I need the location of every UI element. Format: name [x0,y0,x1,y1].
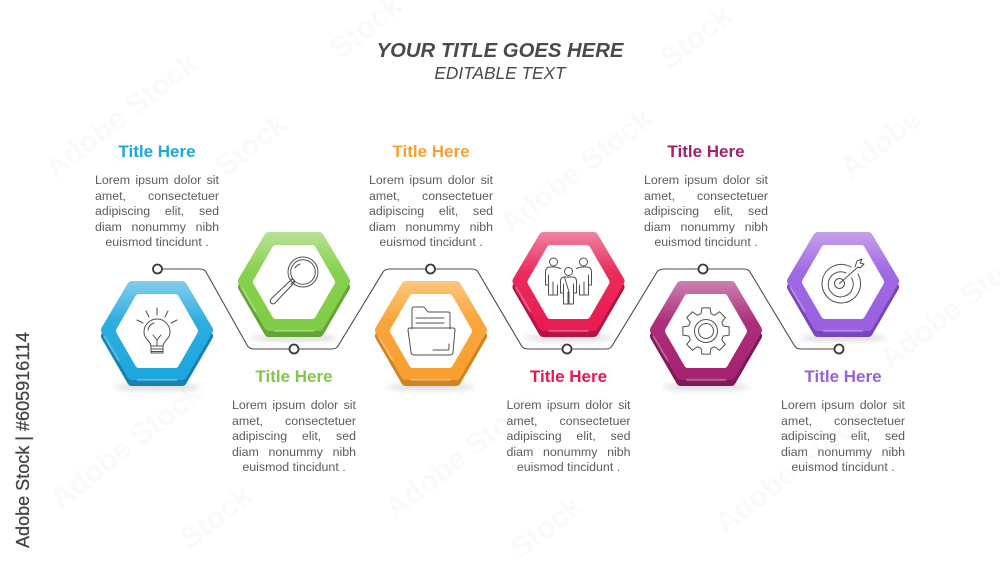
text block 6: diam nonummy nibh [781,444,905,458]
text block 2: euismod tincidunt . [242,460,346,474]
icon: gear [683,308,729,354]
text block 6 [781,367,905,474]
text block 6: euismod tincidunt . [791,460,895,474]
text block 1: euismod tincidunt . [105,235,209,249]
text block 3: Lorem ipsum dolor sit [369,173,493,187]
text block 3: Title Here [392,142,470,161]
hexagon 4: red team [516,237,620,341]
text block 6: Lorem ipsum dolor sit [781,398,905,412]
text block 3: euismod tincidunt . [379,235,483,249]
watermark pattern: Adobe [834,102,928,186]
text block 5: euismod tincidunt . [654,235,758,249]
icon: magnifier [270,257,318,304]
watermark pattern: Adobe Stock [709,401,874,541]
text block 1: diam nonummy nibh [95,220,219,234]
watermark pattern: Adobe Stock [44,376,209,516]
text block 2: Title Here [255,367,333,386]
text block 2 [232,367,356,474]
hexagon 3: orange folder [378,286,482,390]
icon: target with arrow [822,259,864,303]
text block 6: Title Here [804,367,882,386]
title: YOUR TITLE GOES HERE [377,40,623,62]
hexagon 2: green magnifier [241,237,345,341]
connector line with nodes [153,264,844,354]
text block 4: Lorem ipsum dolor sit [506,398,630,412]
watermark pattern: Stock [654,0,739,76]
watermark pattern: Adobe Stock [39,46,204,186]
text block 1: amet, consectetuer [95,188,219,202]
text block 1: Title Here [118,142,196,161]
watermark pattern: Stock [209,107,294,184]
watermark pattern: Stock [174,479,259,556]
text block 5: diam nonummy nibh [644,220,768,234]
text block 4: Title Here [530,367,607,386]
text block 3 [369,142,493,249]
text block 5: amet, consectetuer [644,188,768,202]
text block 2: adipiscing elit, sed [232,429,356,443]
hexagon 5: magenta gear [653,286,757,390]
watermark pattern: Adobe Stock [379,386,544,526]
hexagon 6: purple target [790,237,894,341]
text block 2: Lorem ipsum dolor sit [232,398,356,412]
text block 4: diam nonummy nibh [506,444,630,458]
icon: folder [408,307,455,355]
text block 6: adipiscing elit, sed [781,429,905,443]
text block 3: diam nonummy nibh [369,220,493,234]
text block 4: amet, consectetuer [506,414,630,428]
text block 1: Lorem ipsum dolor sit [95,173,219,187]
stock credit: Adobe Stock | #605916114 [13,332,33,548]
subtitle: EDITABLE TEXT [434,63,566,83]
text block 6: amet, consectetuer [781,414,905,428]
text block 5: Lorem ipsum dolor sit [644,173,768,187]
text block 1: adipiscing elit, sed [95,204,219,218]
text block 3: adipiscing elit, sed [369,204,493,218]
text block 5: Title Here [667,142,745,161]
text block 4: euismod tincidunt . [517,460,620,474]
text block 2: diam nonummy nibh [232,444,356,458]
text block 4: adipiscing elit, sed [506,429,630,443]
text block 1 [95,142,219,249]
text block 4 [506,367,630,474]
text block 5 [644,142,768,249]
watermark pattern: Adobe Stock [494,101,659,241]
text block 2: amet, consectetuer [232,414,356,428]
text block 3: amet, consectetuer [369,188,493,202]
icon: team of people [546,258,592,304]
hexagon 1: blue lightbulb [104,286,208,390]
icon: lightbulb [137,308,177,353]
text block 5: adipiscing elit, sed [644,204,768,218]
